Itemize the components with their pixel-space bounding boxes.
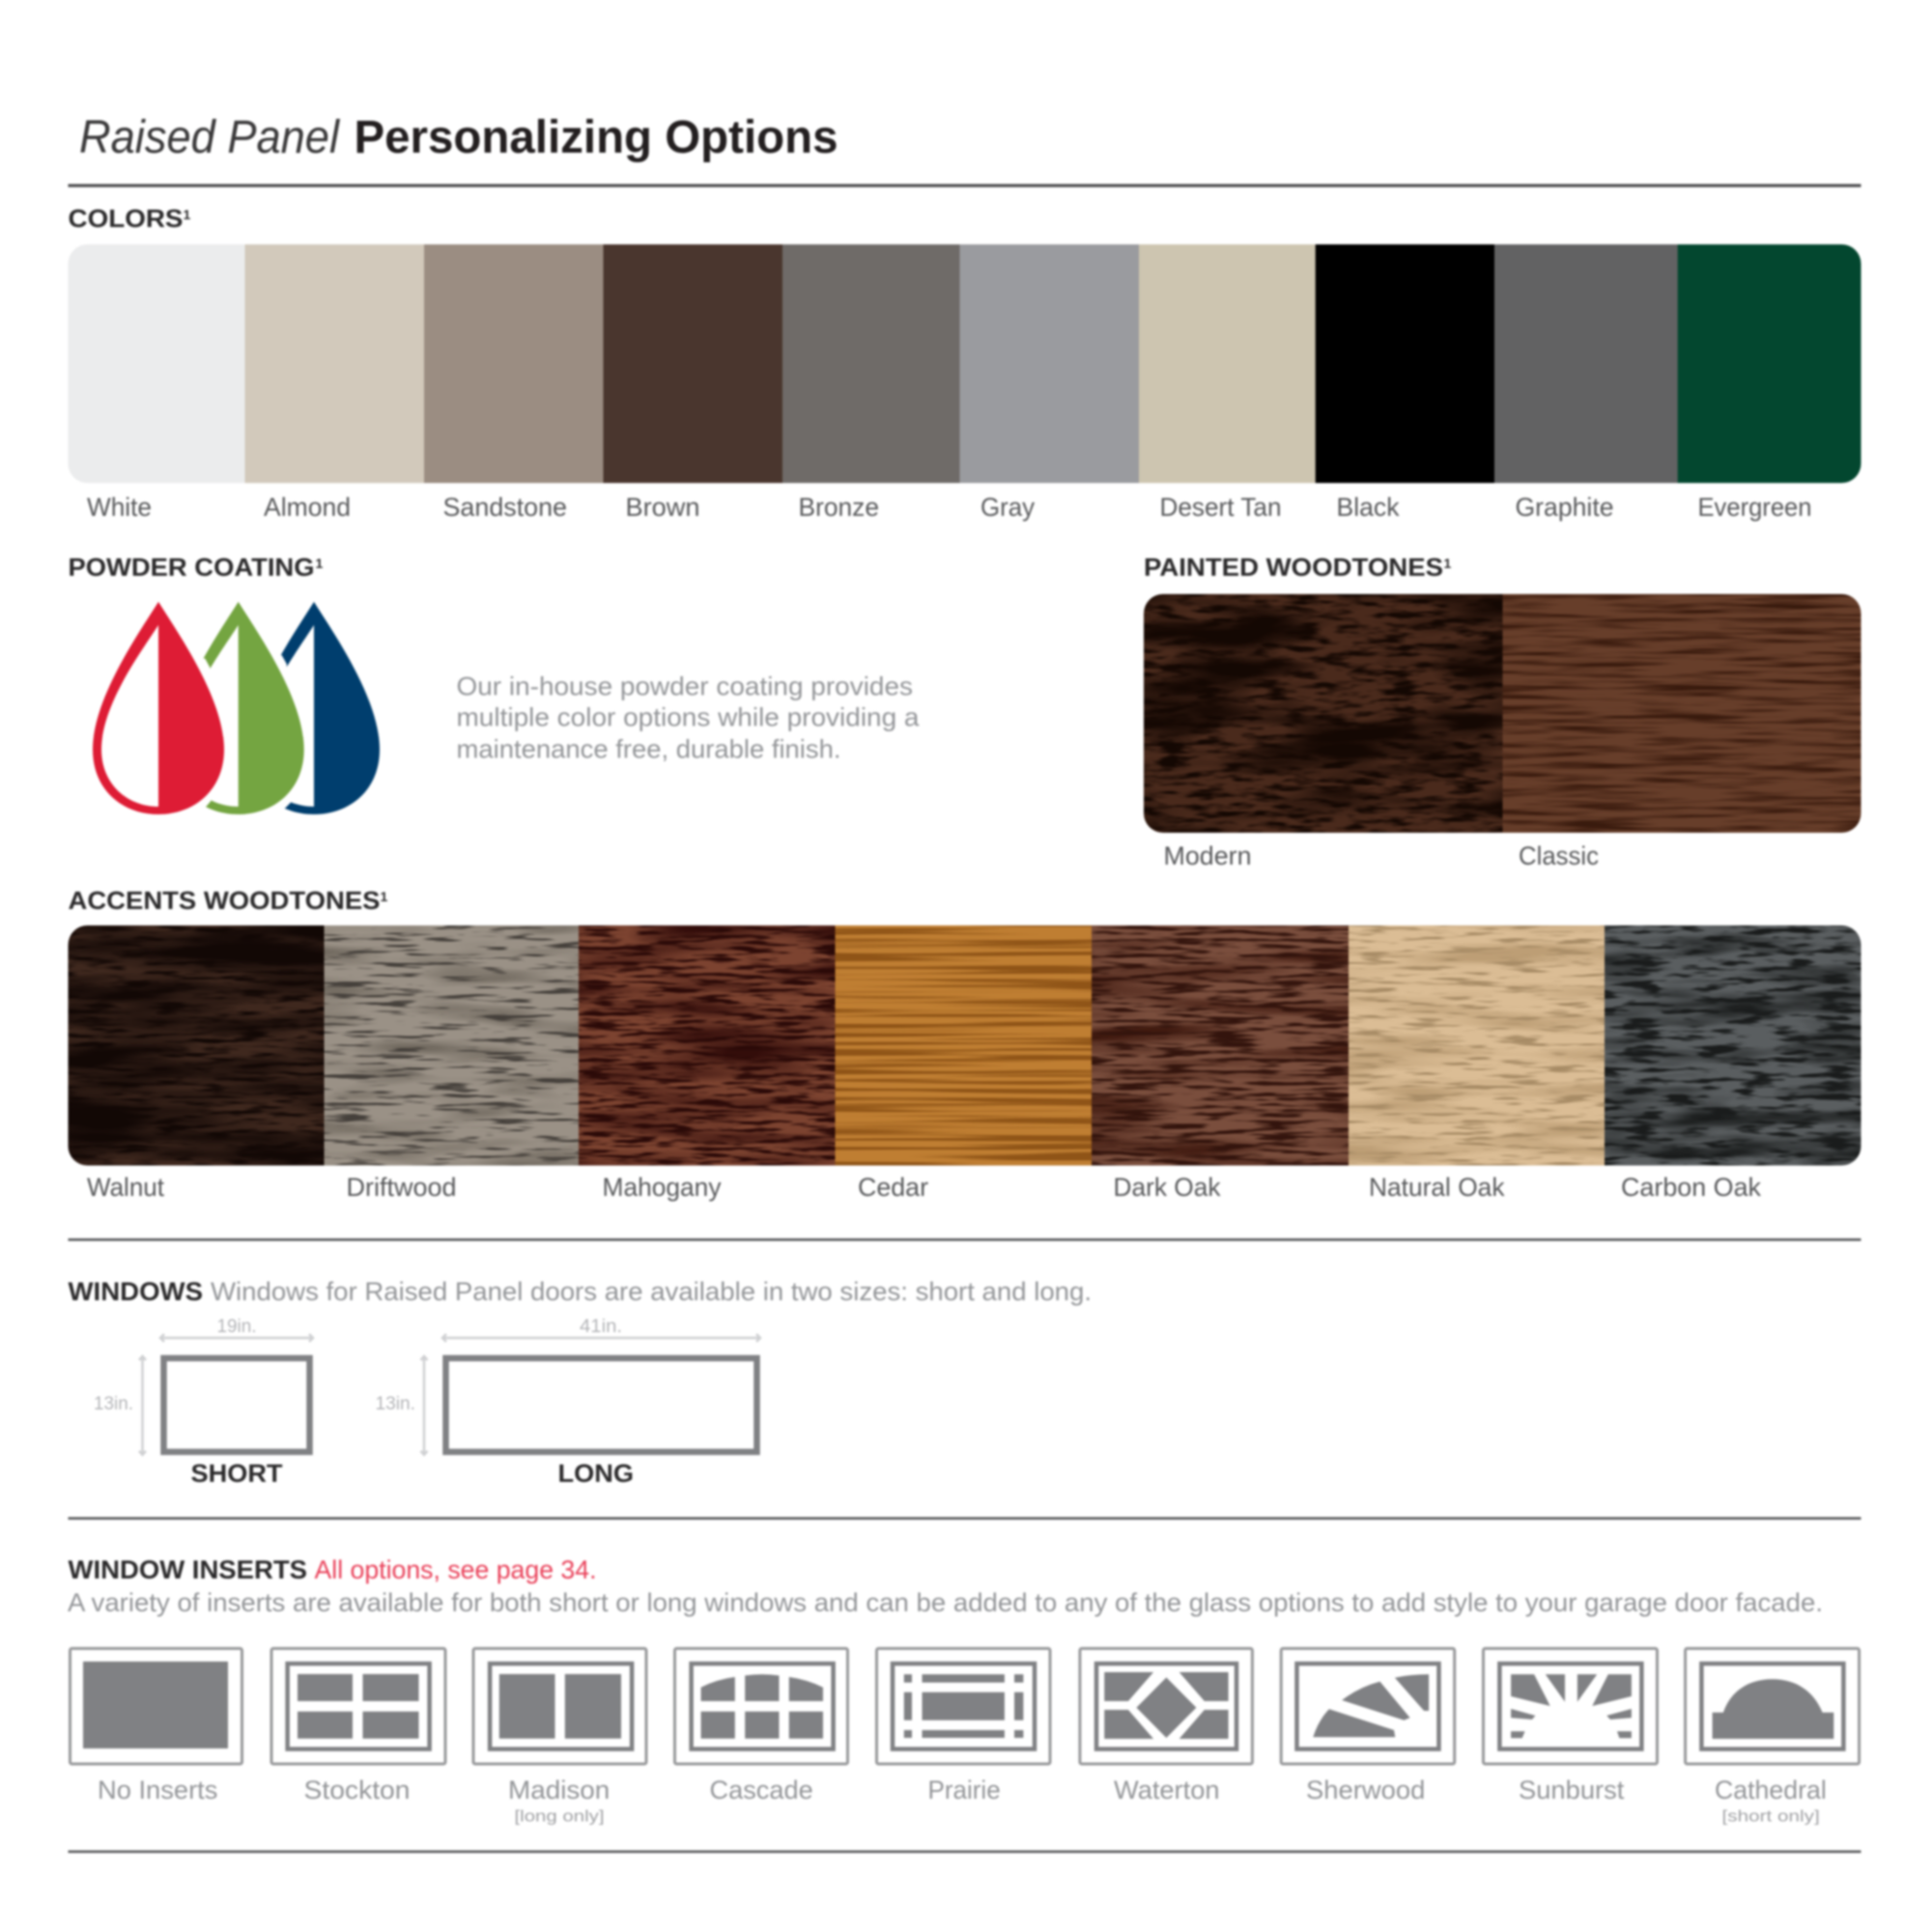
window diagram: long: 13in. bbox=[375, 1394, 415, 1414]
wood labels: Classic bbox=[1519, 841, 1599, 870]
inserts description: A variety of inserts are available for both short or long windows and can be added to any of the glass options to add style to your garage door facade. bbox=[68, 1588, 1823, 1617]
wood swatches: modern and classic bbox=[1144, 594, 1861, 833]
powder coating description: maintenance free, durable finish. bbox=[456, 734, 840, 763]
icon: blue drop bbox=[242, 602, 380, 814]
heading: powder coating: POWDER COATING bbox=[68, 553, 315, 582]
insert: madison bbox=[473, 1648, 646, 1826]
panel: accents woodtones bbox=[68, 886, 1861, 1202]
window diagram: long: LONG bbox=[558, 1459, 634, 1488]
heading: windows: WINDOWS bbox=[68, 1277, 203, 1306]
wood labels: Carbon Oak bbox=[1621, 1173, 1761, 1202]
heading: accents woodtones: 1 bbox=[381, 889, 388, 904]
wood swatches bbox=[68, 925, 1861, 1166]
window diagram: long bbox=[375, 1317, 760, 1488]
insert: cascade bbox=[674, 1648, 848, 1804]
panel: painted woodtones bbox=[1144, 553, 1861, 870]
icon: green drop bbox=[164, 602, 304, 814]
wood labels: Natural Oak bbox=[1369, 1173, 1505, 1202]
powder coating description: Our in-house powder coating provides bbox=[456, 672, 913, 701]
heading: colors: 1 bbox=[184, 207, 191, 222]
insert: no inserts: No Inserts bbox=[98, 1776, 217, 1804]
powder coating description bbox=[456, 672, 921, 763]
color labels: Gray bbox=[980, 493, 1035, 522]
wood labels bbox=[87, 1173, 1761, 1202]
color labels: Evergreen bbox=[1698, 493, 1812, 522]
wood labels: Cedar bbox=[858, 1173, 928, 1202]
insert: prairie bbox=[877, 1648, 1050, 1804]
panel: windows bbox=[68, 1277, 1092, 1488]
color swatches bbox=[68, 244, 1861, 483]
heading: window inserts bbox=[68, 1555, 597, 1584]
insert: waterton bbox=[1080, 1648, 1252, 1804]
heading: powder coating: 1 bbox=[315, 555, 323, 571]
heading: colors: COLORS bbox=[68, 204, 184, 233]
insert: no inserts bbox=[70, 1648, 242, 1804]
insert: cascade: Cascade bbox=[709, 1776, 813, 1804]
insert: cathedral: Cathedral bbox=[1715, 1776, 1827, 1804]
heading: painted woodtones: 1 bbox=[1443, 555, 1451, 571]
title: Personalizing Options bbox=[354, 112, 838, 163]
icon: red drop bbox=[93, 602, 224, 814]
insert: sherwood bbox=[1281, 1648, 1455, 1804]
heading: window inserts: WINDOW INSERTS bbox=[68, 1555, 307, 1584]
insert: stockton: Stockton bbox=[303, 1776, 410, 1804]
icon: paint drops bbox=[93, 602, 380, 814]
title: Raised Panel bbox=[79, 112, 340, 163]
wood labels: Mahogany bbox=[603, 1173, 722, 1202]
wood labels bbox=[1163, 841, 1599, 870]
color labels: Black bbox=[1337, 493, 1400, 522]
insert: stockton bbox=[271, 1648, 445, 1804]
window diagram: short: 13in. bbox=[94, 1394, 133, 1414]
wood labels: Modern bbox=[1163, 841, 1252, 870]
heading: accents woodtones: ACCENTS WOODTONES bbox=[68, 886, 381, 915]
wood labels: Dark Oak bbox=[1113, 1173, 1221, 1202]
wood labels: Driftwood bbox=[346, 1173, 456, 1202]
heading: window inserts: All options, see page 34. bbox=[315, 1555, 597, 1584]
insert: sherwood: Sherwood bbox=[1306, 1776, 1425, 1804]
window diagram: short: 19in. bbox=[216, 1317, 257, 1337]
insert: sunburst bbox=[1484, 1648, 1658, 1804]
insert: cathedral: [short only] bbox=[1721, 1806, 1820, 1826]
insert: waterton: Waterton bbox=[1114, 1776, 1219, 1804]
insert: cathedral bbox=[1686, 1648, 1860, 1826]
wood labels: Walnut bbox=[87, 1173, 164, 1202]
panel: window inserts bbox=[68, 1555, 1860, 1826]
color labels: White bbox=[87, 493, 152, 522]
heading: windows: Windows for Raised Panel doors are available in two sizes: short and long. bbox=[211, 1277, 1092, 1306]
panel: powder coating bbox=[68, 553, 921, 814]
color labels: Bronze bbox=[798, 493, 879, 522]
color labels: Desert Tan bbox=[1159, 493, 1281, 522]
title bbox=[79, 112, 838, 163]
insert: sunburst: Sunburst bbox=[1519, 1776, 1625, 1804]
color labels: Graphite bbox=[1515, 493, 1613, 522]
panel: colors bbox=[68, 204, 1861, 522]
window diagram: short: SHORT bbox=[191, 1459, 283, 1488]
insert: prairie: Prairie bbox=[927, 1776, 1001, 1804]
color labels: Sandstone bbox=[442, 493, 567, 522]
window diagram: long: 41in. bbox=[580, 1317, 622, 1337]
insert: madison: [long only] bbox=[514, 1806, 605, 1826]
window diagram: short bbox=[94, 1317, 313, 1488]
heading: painted woodtones: PAINTED WOODTONES bbox=[1144, 553, 1443, 582]
color labels bbox=[87, 493, 1812, 522]
insert: madison: Madison bbox=[508, 1776, 610, 1804]
color labels: Almond bbox=[264, 493, 351, 522]
powder coating description: multiple color options while providing a bbox=[456, 703, 921, 732]
color labels: Brown bbox=[626, 493, 699, 522]
